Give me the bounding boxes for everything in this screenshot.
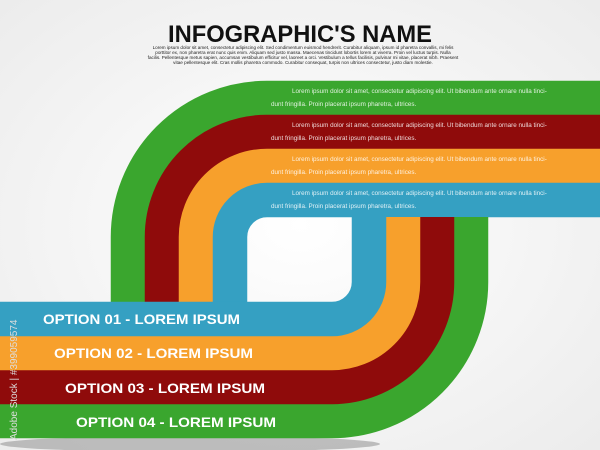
intro paragraph: Lorem ipsum dolor sit amet, consectetur adipiscing elit. Sed condimentum euismod hendrerit. Curabitur aliquam, ipsum id pharetra convallis, mi felis — [153, 45, 454, 50]
band descriptions: Lorem ipsum dolor sit amet, consectetur adipiscing elit. Ut bibendum ante ornare nulla tinci- — [292, 190, 547, 197]
band descriptions: dunt fringilla. Proin placerat ipsum pharetra, ultrices. — [271, 135, 416, 142]
band descriptions: Lorem ipsum dolor sit amet, consectetur adipiscing elit. Ut bibendum ante ornare nulla tinci- — [292, 122, 547, 129]
band descriptions: Lorem ipsum dolor sit amet, consectetur adipiscing elit. Ut bibendum ante ornare nulla tinci- — [292, 88, 547, 95]
option labels: OPTION 04 - LOREM IPSUM — [76, 414, 276, 430]
option labels — [43, 311, 276, 430]
band descriptions: dunt fringilla. Proin placerat ipsum pharetra, ultrices. — [271, 101, 416, 108]
band descriptions — [271, 88, 547, 210]
band descriptions: dunt fringilla. Proin placerat ipsum pharetra, ultrices. — [271, 203, 416, 210]
ribbons: right arcs — [0, 217, 471, 421]
watermark id: Adobe Stock | #399059574 — [9, 319, 20, 440]
intro paragraph: porttitor ex, non pharetra erat nunc quis enim. Aliquam sed justo massa. Maecenas tincidunt lobortis lorem at viverra. Proin vel luctus turpis. Nulla — [155, 50, 451, 55]
intro paragraph — [148, 45, 459, 65]
ribbons: left arcs — [128, 98, 600, 302]
title: INFOGRAPHIC'S NAME — [168, 21, 432, 48]
band descriptions: Lorem ipsum dolor sit amet, consectetur adipiscing elit. Ut bibendum ante ornare nulla tinci- — [292, 156, 547, 163]
option labels: OPTION 02 - LOREM IPSUM — [54, 345, 253, 361]
shadow — [0, 436, 380, 450]
band descriptions: dunt fringilla. Proin placerat ipsum pharetra, ultrices. — [271, 169, 416, 176]
option labels: OPTION 01 - LOREM IPSUM — [43, 311, 240, 327]
intro paragraph: facilis. Pellentesque metus sapien, accumsan vestibulum efficitur vel, laoreet a orci. Vestibulum a tellus facilisis, pulvinar mi vitae, placerat nibh. Praesent — [148, 55, 459, 60]
option labels: OPTION 03 - LOREM IPSUM — [65, 380, 265, 396]
intro paragraph: vitae pellentesque elit. Cras mollis pharetra commodo. Curabitur consequat, turpis non ultrices consectetur, justo diam molestie. — [173, 60, 433, 65]
